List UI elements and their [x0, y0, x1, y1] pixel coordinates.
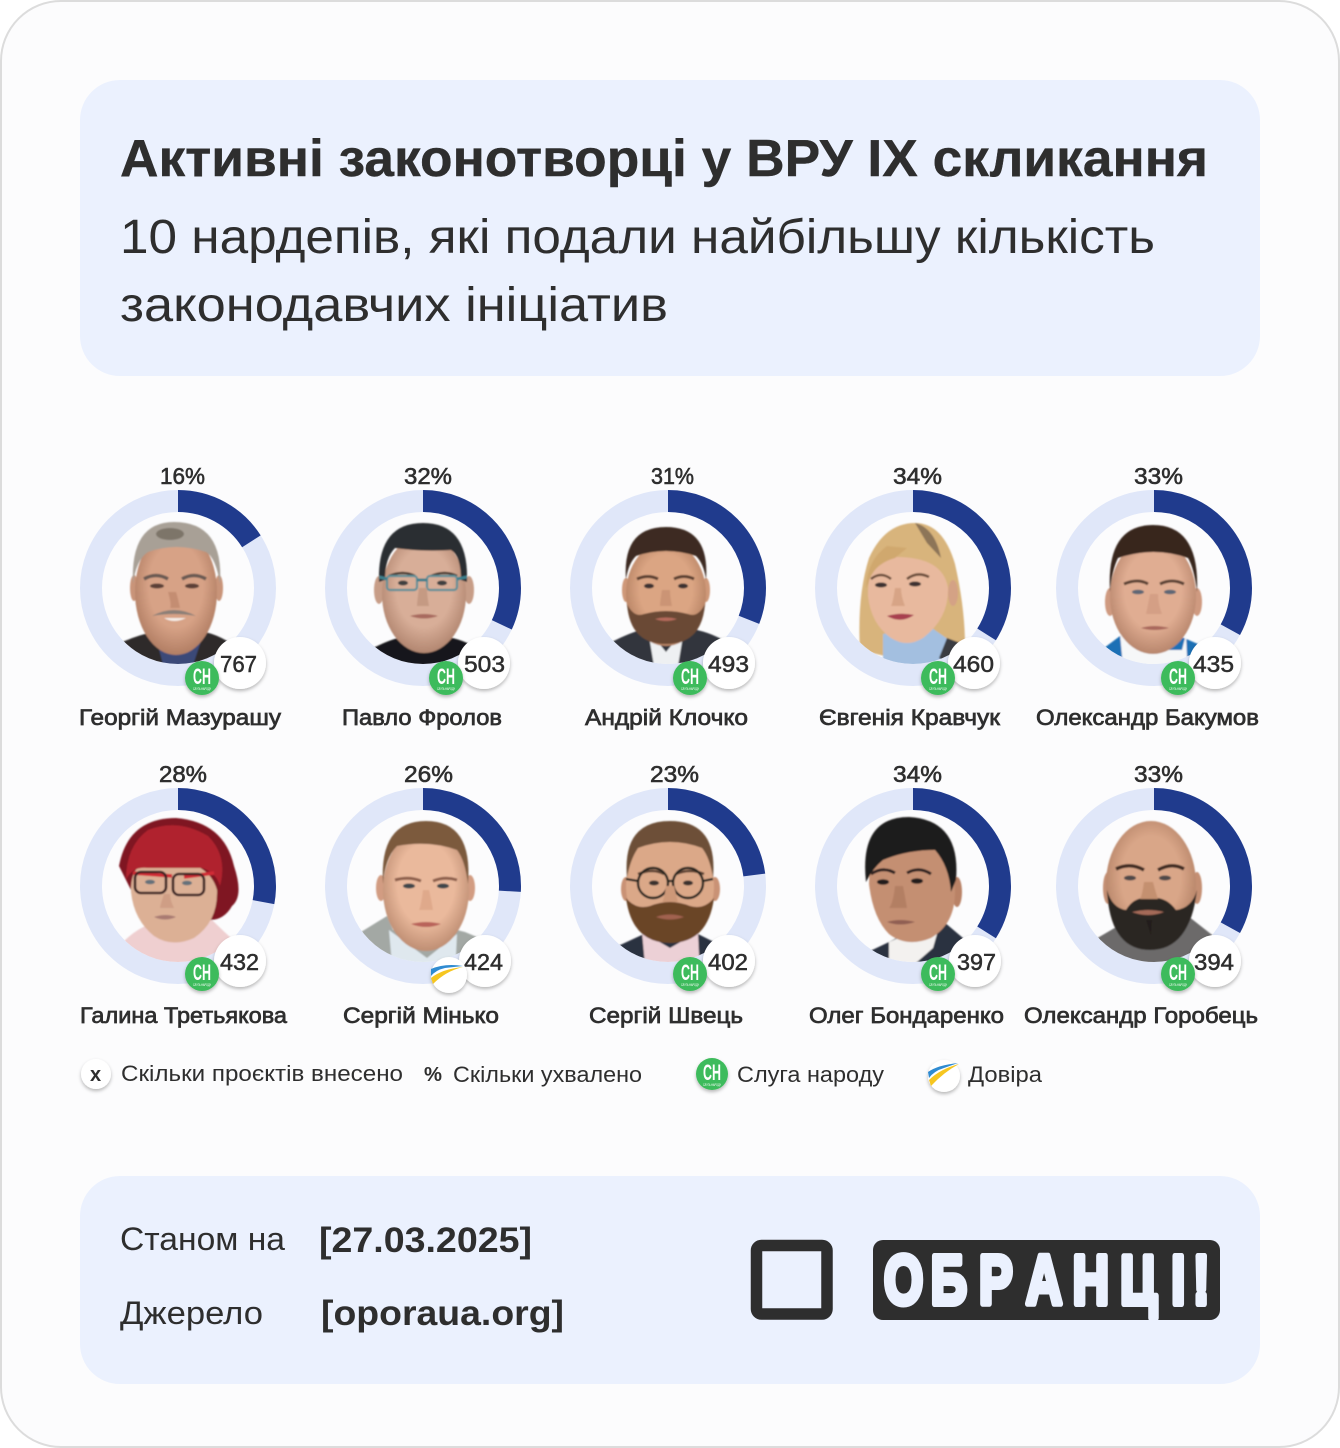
- name: Павло Фролов: [342, 705, 502, 730]
- badge: Слуга народу: СН: [681, 960, 699, 985]
- legend: share approved: Скільки ухвалено: [453, 1062, 642, 1087]
- name: Галина Третьякова: [80, 1003, 288, 1028]
- badge: Слуга народу: СН: [1169, 960, 1187, 985]
- badge: Слуга народу: СЛУГА НАРОДУ: [929, 982, 947, 987]
- badge: Слуга народу: [673, 661, 707, 695]
- donut chart: [826, 799, 1000, 973]
- badge: Слуга народу: [1161, 661, 1195, 695]
- badge: Слуга народу: СН: [193, 960, 211, 985]
- portrait: [859, 523, 965, 678]
- badge: Слуга народу: СЛУГА НАРОДУ: [1169, 982, 1187, 987]
- portrait: [373, 523, 474, 678]
- title: Активні законотворці у ВРУ ІХ скликання: [120, 130, 1208, 188]
- count bubble: 424: [464, 949, 503, 975]
- count bubble: 435: [1193, 651, 1234, 677]
- donut chart: [1067, 799, 1241, 973]
- date label: Станом на: [120, 1221, 285, 1257]
- legend: share approved: %: [424, 1064, 442, 1086]
- badge: Слуга народу: СЛУГА НАРОДУ: [681, 982, 699, 987]
- subtitle: [120, 211, 1155, 332]
- legend: projects submitted: Скільки проєктів внесено: [121, 1061, 403, 1086]
- count bubble: [703, 637, 755, 689]
- donut chart: [581, 501, 755, 675]
- donut chart: [336, 799, 510, 973]
- badge: Довіра: [431, 957, 467, 993]
- badge: Слуга народу: [673, 957, 707, 991]
- name: Сергій Мінько: [343, 1003, 499, 1028]
- donut chart: [581, 799, 755, 973]
- portrait: [865, 817, 963, 976]
- logo: square icon: [756, 1246, 827, 1314]
- count bubble: [459, 935, 511, 987]
- percent approved: 16%: [160, 463, 205, 489]
- deputy: Олег Бондаренко: [809, 761, 1004, 1028]
- deputy: Павло Фролов: [336, 463, 510, 730]
- panel: header: [80, 80, 1260, 376]
- badge: Слуга народу: СЛУГА НАРОДУ: [193, 686, 211, 691]
- legend: Довіра: [928, 1060, 1043, 1092]
- deputy: Євгенія Кравчук: [819, 463, 1000, 730]
- percent approved: 32%: [404, 463, 452, 489]
- legend: [81, 1058, 1043, 1092]
- percent approved: 28%: [159, 761, 207, 787]
- count bubble: 394: [1194, 949, 1234, 975]
- logo: wordmark: ОБРАНЦІ!: [884, 1241, 1210, 1319]
- portrait: [119, 818, 240, 976]
- portrait: [618, 821, 720, 976]
- count bubble: 460: [953, 651, 994, 677]
- name: Сергій Швець: [589, 1003, 743, 1028]
- badge: Слуга народу: [185, 661, 219, 695]
- portrait: [362, 820, 477, 962]
- donut chart: [1067, 501, 1241, 675]
- count bubble: 493: [708, 651, 749, 677]
- badge: Слуга народу: СЛУГА НАРОДУ: [437, 686, 455, 691]
- count bubble: [1189, 935, 1241, 987]
- legend: Слуга народу: СЛУГА НАРОДУ: [703, 1082, 721, 1087]
- deputy: Сергій Швець: [581, 761, 755, 1028]
- name: Олександр Горобець: [1024, 1003, 1258, 1028]
- percent approved: 33%: [1134, 761, 1183, 787]
- badge: Слуга народу: СН: [929, 664, 947, 689]
- badge: Слуга народу: СН: [437, 664, 455, 689]
- percent approved: 26%: [404, 761, 453, 787]
- deputy: Сергій Мінько: [336, 761, 511, 1028]
- name: Андрій Клочко: [585, 705, 748, 730]
- percent approved: 31%: [651, 463, 694, 489]
- legend: Слуга народу: СН: [703, 1060, 721, 1085]
- portrait: [1098, 820, 1212, 962]
- count bubble: [949, 935, 1001, 987]
- count bubble: 432: [220, 949, 259, 975]
- deputy: Андрій Клочко: [581, 463, 755, 730]
- count bubble: 397: [957, 949, 996, 975]
- portrait: [123, 521, 228, 664]
- date value: [27.03.2025]: [319, 1221, 532, 1260]
- badge: Слуга народу: [429, 661, 463, 695]
- source label: Джерело: [120, 1295, 263, 1331]
- badge: Слуга народу: СН: [929, 960, 947, 985]
- count bubble: 767: [220, 651, 257, 677]
- badge: Слуга народу: СН: [1169, 664, 1187, 689]
- portrait: [613, 526, 722, 664]
- name: Олександр Бакумов: [1036, 705, 1259, 730]
- badge: Слуга народу: [185, 957, 219, 991]
- badge: Слуга народу: СН: [193, 664, 211, 689]
- donut chart: [91, 501, 265, 675]
- legend: Слуга народу: Слуга народу: [737, 1062, 884, 1087]
- donut chart: [336, 501, 510, 675]
- name: Георгій Мазурашу: [79, 705, 281, 730]
- percent approved: 33%: [1134, 463, 1183, 489]
- count bubble: [948, 637, 1000, 689]
- badge: Слуга народу: СЛУГА НАРОДУ: [929, 686, 947, 691]
- source value: [oporaua.org]: [321, 1294, 564, 1333]
- portrait: [1104, 524, 1203, 657]
- donut chart: [91, 799, 265, 973]
- percent approved: 34%: [893, 761, 942, 787]
- percent approved: 34%: [893, 463, 942, 489]
- badge: Слуга народу: [921, 661, 955, 695]
- deputy: Георгій Мазурашу: [79, 463, 281, 730]
- count bubble: [703, 935, 755, 987]
- badge: Слуга народу: СЛУГА НАРОДУ: [193, 982, 211, 987]
- badge: Слуга народу: СН: [681, 664, 699, 689]
- badge: Слуга народу: [1161, 957, 1195, 991]
- legend: projects submitted: [81, 1059, 403, 1089]
- count bubble: 503: [464, 651, 505, 677]
- count bubble: 402: [708, 949, 748, 975]
- subtitle: 10 нардепів, які подали найбільшу кількість: [120, 211, 1155, 264]
- badge: Слуга народу: СЛУГА НАРОДУ: [1169, 686, 1187, 691]
- deputy: Олександр Бакумов: [1036, 463, 1259, 730]
- count bubble: [1189, 637, 1241, 689]
- deputy: Олександр Горобець: [1024, 761, 1258, 1028]
- deputy: Галина Третьякова: [80, 761, 288, 1028]
- legend: projects submitted: x: [90, 1064, 101, 1086]
- legend: Довіра: Довіра: [968, 1062, 1043, 1087]
- percent approved: 23%: [650, 761, 699, 787]
- name: Олег Бондаренко: [809, 1003, 1004, 1028]
- badge: Слуга народу: СЛУГА НАРОДУ: [681, 686, 699, 691]
- donut chart: [826, 501, 1000, 675]
- legend: Слуга народу: [696, 1058, 884, 1090]
- panel: footer: [80, 1176, 1260, 1384]
- badge: Слуга народу: [921, 957, 955, 991]
- count bubble: [214, 935, 266, 987]
- count bubble: [214, 637, 266, 689]
- count bubble: [458, 637, 510, 689]
- subtitle: законодавчих ініціатив: [120, 279, 668, 332]
- name: Євгенія Кравчук: [819, 705, 1000, 730]
